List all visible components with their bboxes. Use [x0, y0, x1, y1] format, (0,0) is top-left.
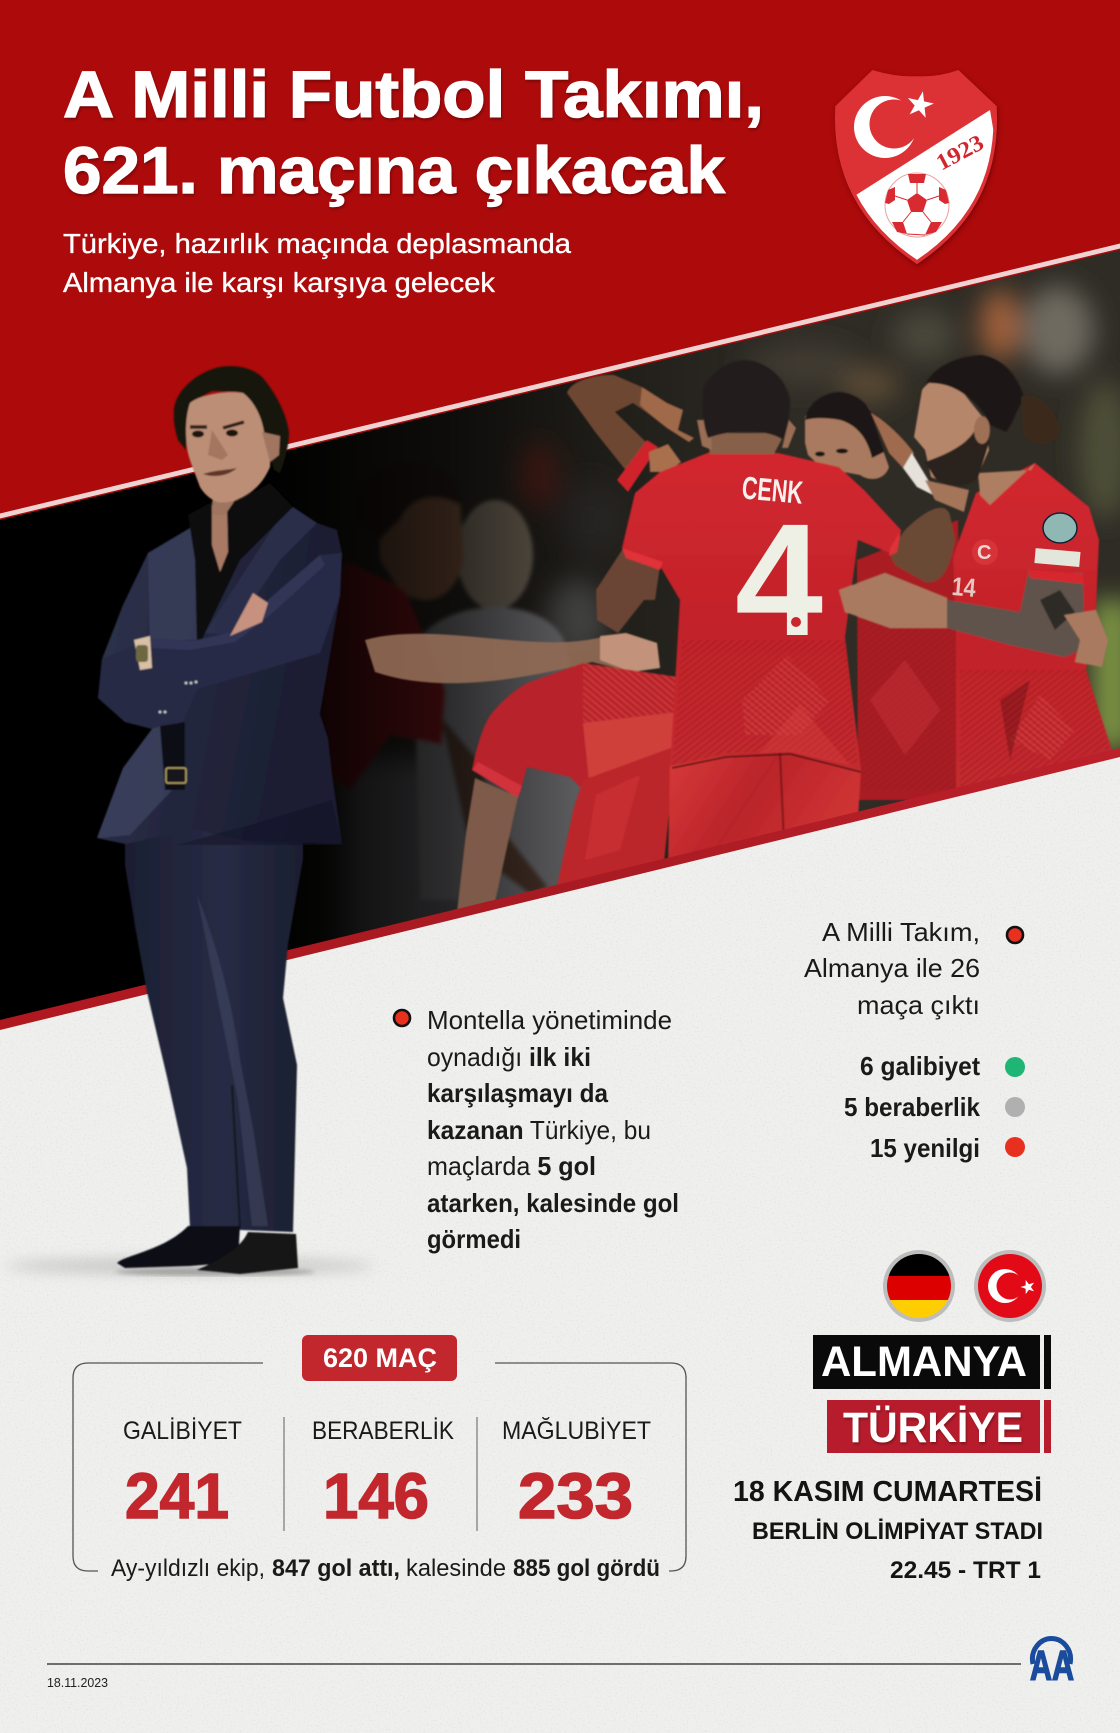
neck [212, 485, 245, 515]
legend: 5 beraberlik [844, 1092, 980, 1122]
subtitle: Almanya ile karşı karşıya gelecek [63, 267, 496, 298]
title: 621. maçına çıkacak [63, 133, 725, 207]
near arm [150, 553, 342, 689]
legend: 15 yenilgi [870, 1133, 980, 1163]
legend: 6 galibiyet [860, 1051, 980, 1081]
icon: bullet [394, 1010, 410, 1026]
body text: maçlarda 5 gol [427, 1151, 596, 1181]
stat numbers: 241 [125, 1460, 229, 1532]
intro text: A Milli Takım, [822, 917, 980, 947]
match details: 22.45 - TRT 1 [890, 1557, 1041, 1584]
badge: 620 matches: 620 MAÇ [323, 1343, 437, 1373]
lapels and folds [148, 528, 200, 640]
tattooed arm [947, 573, 1084, 657]
icon: Turkey flag [974, 1250, 1046, 1322]
shirt crest and patches: C [977, 542, 991, 564]
body text: atarken, kalesinde gol [427, 1188, 679, 1218]
stat labels: MAĞLUBİYET [502, 1416, 651, 1445]
icon: football federation crest [837, 72, 1005, 272]
coach figure [97, 366, 342, 1274]
far arm [98, 645, 197, 728]
match details: BERLİN OLİMPİYAT STADI [752, 1518, 1043, 1545]
stat numbers: 146 [323, 1460, 429, 1532]
jersey name: CENK [741, 470, 804, 511]
body text: Montella yönetiminde [427, 1005, 672, 1035]
intro text: maça çıktı [857, 990, 980, 1020]
face [186, 392, 271, 502]
shirt [188, 483, 293, 650]
body text: kazanan Türkiye, bu [427, 1115, 651, 1145]
body text: karşılaşmayı da [427, 1078, 608, 1108]
intro text: Almanya ile 26 [804, 953, 980, 983]
center player [596, 547, 660, 633]
footer line and date: 18.11.2023 [47, 1675, 108, 1690]
shirt crest and patches [951, 513, 1081, 603]
red header panel [0, 0, 1120, 522]
callout: Montella record [394, 1005, 679, 1254]
Hakan [857, 520, 962, 800]
floor shadow [5, 1258, 375, 1276]
red band at lower edge [0, 748, 1120, 1030]
stat labels: BERABERLİK [312, 1416, 454, 1445]
right player [953, 463, 1112, 795]
photo panel: team celebrating [0, 240, 1120, 1040]
goals note: Ay-yıldızlı ekip, [111, 1555, 265, 1582]
arm over teammate [364, 632, 622, 684]
stat labels: GALİBİYET [123, 1416, 242, 1445]
goals note: 847 gol attı, [272, 1555, 400, 1582]
stat numbers: 233 [518, 1460, 633, 1532]
shirt crest and patches: 14 [951, 571, 978, 603]
icon: bullet [1007, 927, 1023, 943]
legend [844, 1051, 1025, 1163]
icon: football federation crest: 1923 [932, 130, 988, 175]
badge: 620 matches [302, 1335, 457, 1381]
goals note: kalesinde [406, 1555, 506, 1582]
callout: record against Germany [804, 917, 1025, 1163]
subtitle: Türkiye, hazırlık maçında deplasmanda [63, 228, 571, 259]
body text: görmedi [427, 1224, 521, 1254]
panel: overall record [73, 1335, 686, 1582]
jersey number: 4 [735, 490, 823, 669]
stat labels [123, 1416, 651, 1445]
team label: Türkiye: TÜRKİYE [843, 1404, 1023, 1452]
stat numbers [125, 1460, 633, 1532]
title: A Milli Futbol Takımı, [63, 57, 764, 131]
body text: oynadığı ilk iki [427, 1042, 591, 1072]
team label: Almanya: ALMANYA [821, 1338, 1027, 1386]
title [63, 57, 764, 207]
goals note [111, 1555, 660, 1582]
icon: AA logo: AA [1030, 1642, 1074, 1689]
diagonal white line [0, 244, 1120, 518]
match details: 18 KASIM CUMARTESİ [733, 1476, 1042, 1508]
match details [733, 1476, 1043, 1584]
body text [427, 1005, 679, 1254]
hair [174, 366, 289, 473]
subtitle [63, 228, 571, 298]
intro text [804, 917, 980, 1020]
shirt emblem [791, 617, 801, 627]
icon: Germany flag [883, 1250, 955, 1322]
goals note: 885 gol gördü [513, 1555, 660, 1582]
icon: AA logo [1030, 1638, 1074, 1689]
